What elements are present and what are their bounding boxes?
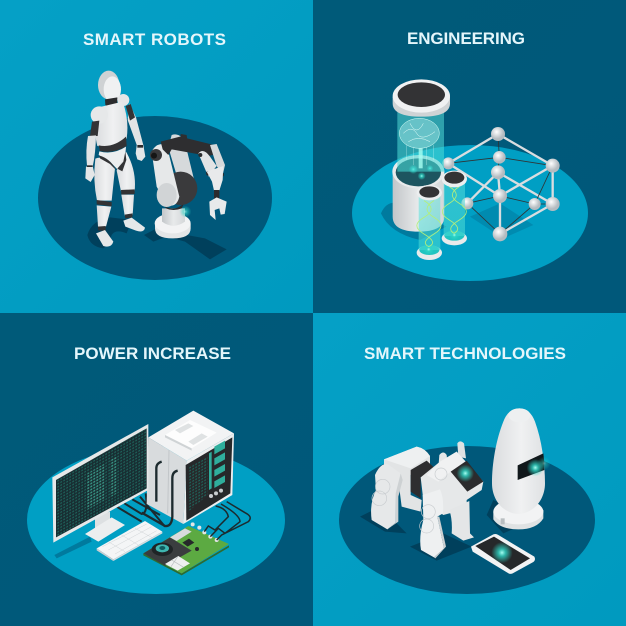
platform: engineering (352, 145, 588, 281)
icon: computer monitor, server, keyboard and circuit board (52, 411, 250, 575)
icon: lab cylinders and molecule lattice (381, 79, 560, 260)
server (142, 411, 234, 526)
cables behind (117, 493, 165, 527)
keyboard (97, 521, 162, 561)
rear leg (371, 464, 401, 529)
icon: robot dog, smart speaker and smartphone (360, 408, 551, 574)
heading: engineering: ENGINEERING (407, 29, 525, 48)
platform: smart robots (38, 116, 272, 280)
robot dog (371, 441, 483, 558)
circuit board (143, 502, 250, 575)
panel: smart robots background (0, 0, 313, 313)
DNA tube right (442, 171, 467, 245)
molecule lattice (442, 127, 560, 241)
panel: power increase background (0, 313, 313, 626)
icon: humanoid robot and robotic arm (85, 71, 227, 259)
large cylinder with brain (392, 79, 450, 232)
platform: smart technologies (339, 446, 595, 594)
head and chest (421, 452, 483, 515)
panel: engineering background (313, 0, 626, 313)
panel: smart technologies background (313, 313, 626, 626)
smartphone (471, 534, 535, 574)
heading: smart robots: SMART ROBOTS (83, 30, 226, 49)
heading: power increase: POWER INCREASE (74, 344, 231, 363)
monitor (52, 424, 148, 543)
DNA tube left (417, 185, 442, 260)
heading: smart technologies: SMART TECHNOLOGIES (364, 344, 566, 363)
smart speaker (492, 408, 551, 529)
rear body (384, 447, 430, 512)
platform: power increase (27, 446, 285, 594)
